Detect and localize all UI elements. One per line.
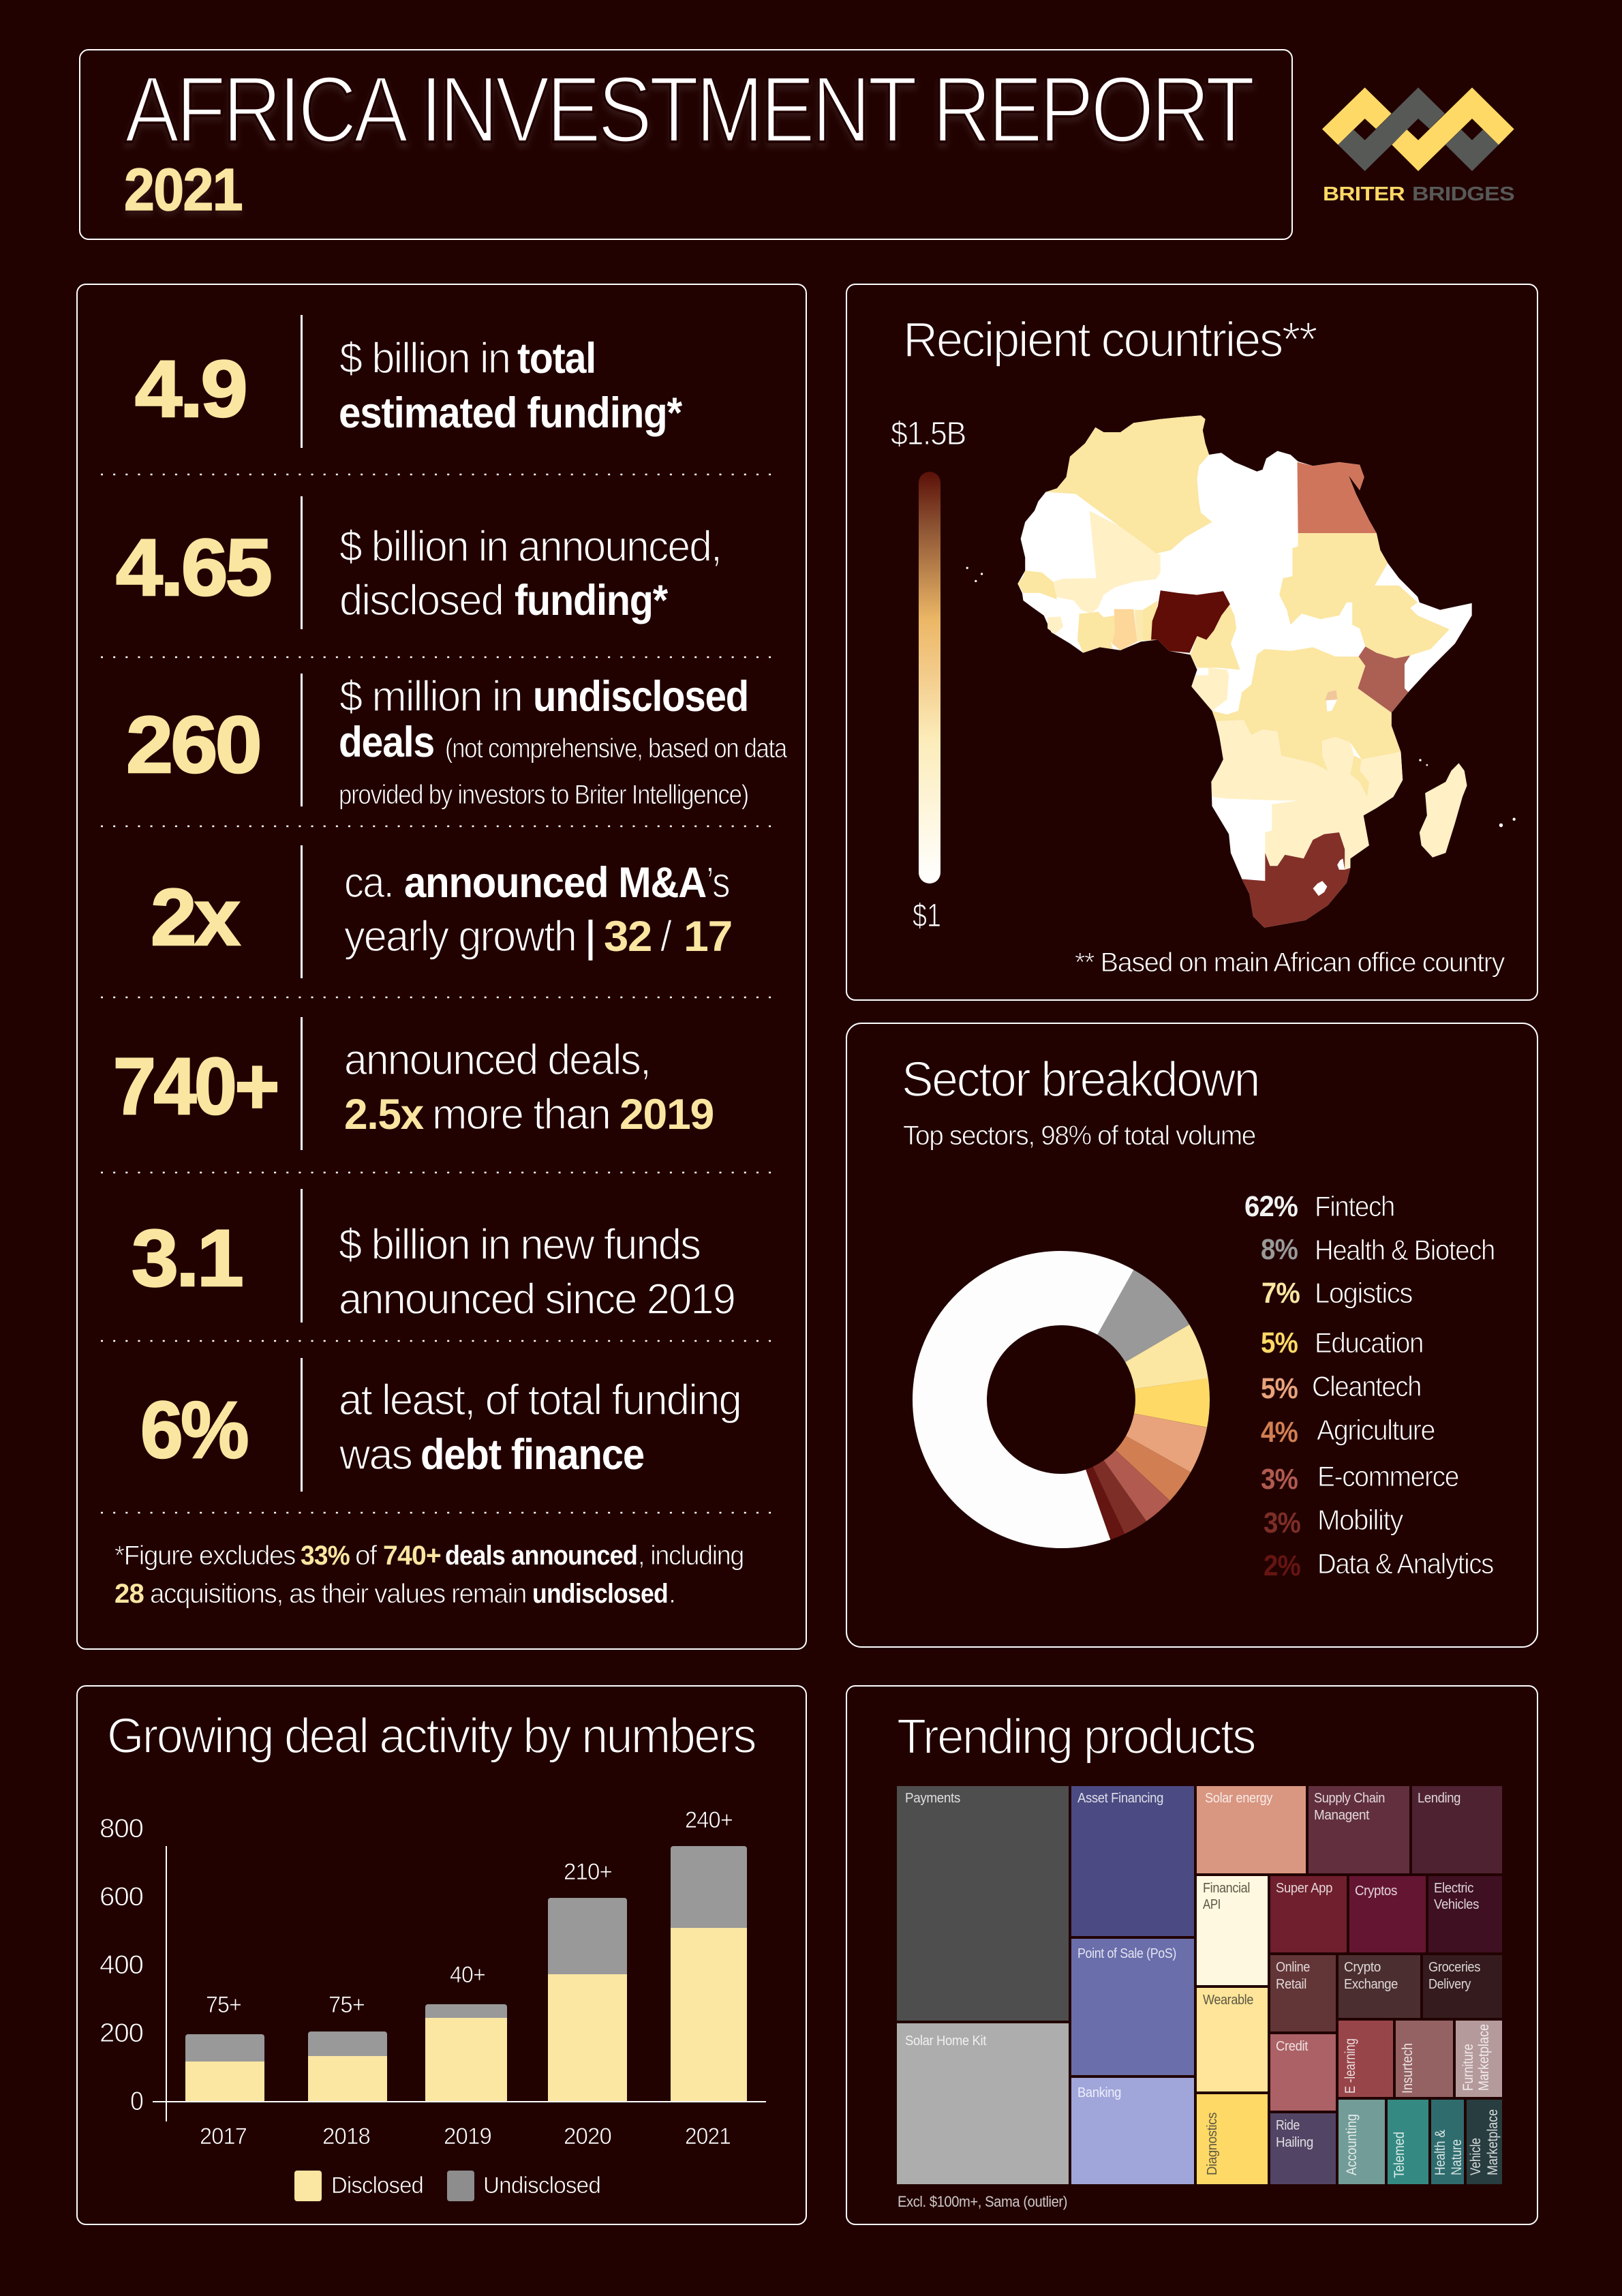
stat: 2x M&A growth: /: [660, 913, 672, 961]
sector legend: Cleantech: [1312, 1370, 1421, 1402]
footnote: 740+: [383, 1541, 441, 1571]
footnote: of: [355, 1541, 378, 1571]
bars 2018: 75+: [328, 1992, 365, 2018]
stat: 4.65 billion disclosed funding: $ billion in announced,: [339, 523, 721, 571]
stat: 2x M&A growth: ’s: [706, 859, 729, 907]
sector legend: Agriculture: [1317, 1414, 1435, 1446]
stat: 6% debt finance: was: [339, 1431, 412, 1479]
stat: 4.9 billion total funding: 4.9: [135, 344, 245, 434]
treemap note: Excl. $100m+, Sama (outlier): [898, 2193, 1067, 2210]
treemap: Solar energy: [1205, 1791, 1272, 1806]
stat: 2x M&A growth: |: [586, 913, 594, 961]
footnote: , including: [638, 1541, 744, 1571]
footnote: [114, 1541, 744, 1609]
stat: 740+ announced deals: 2.5x: [344, 1091, 424, 1138]
stat: 3.1 billion new funds: 3.1: [132, 1213, 242, 1303]
treemap: Solar Home Kit: [905, 2034, 987, 2049]
stat: 260 million undisclosed: 260: [126, 700, 260, 790]
treemap: Crypto: [1344, 1960, 1381, 1975]
treemap: Vehicles: [1434, 1897, 1479, 1912]
stat: 260 million undisclosed: undisclosed: [533, 673, 748, 721]
treemap: Vehicle: [1468, 2138, 1484, 2175]
treemap: Lending: [1418, 1791, 1460, 1806]
stat: 6% debt finance: at least, of total funding: [339, 1376, 741, 1424]
bars 2019: 40+: [450, 1962, 485, 1988]
treemap: Managent: [1314, 1808, 1370, 1823]
logo wordmark: [1323, 183, 1514, 205]
treemap: Financial: [1203, 1881, 1250, 1896]
panel: recipient countries: [846, 284, 1537, 1000]
logo mark: [1322, 87, 1514, 171]
stat: 2x M&A growth: [151, 845, 732, 978]
stat: 740+ announced deals: more than: [432, 1091, 610, 1138]
footnote: deals announced: [445, 1541, 637, 1571]
bars 2020: 210+: [564, 1859, 612, 1885]
sector legend: Health & Biotech: [1315, 1234, 1495, 1266]
colour scale legend: [891, 416, 966, 934]
treemap: Hailing: [1276, 2135, 1313, 2150]
footnote: undisclosed: [532, 1579, 668, 1609]
stat: 2x M&A growth: 2x: [151, 873, 240, 963]
y axis labels: 400: [100, 1950, 143, 1980]
stat: 260 million undisclosed: [126, 673, 788, 810]
stat: 4.65 billion disclosed funding: disclosed: [339, 577, 503, 624]
stat: 4.9 billion total funding: [135, 315, 683, 448]
y axis labels: 0: [130, 2087, 143, 2116]
stat: 3.1 billion new funds: [132, 1189, 735, 1323]
stat: 6% debt finance: [140, 1358, 741, 1492]
sector legend: Mobility: [1317, 1504, 1403, 1536]
treemap: Supply Chain: [1314, 1791, 1385, 1806]
sector legend: Fintech: [1315, 1190, 1394, 1222]
sector legend: 5%: [1261, 1372, 1298, 1405]
bars 2019: [425, 1962, 507, 2149]
sector legend: 8%: [1261, 1233, 1298, 1266]
map footnote: ** Based on main African office country: [1075, 948, 1505, 978]
subheading: Top sectors, 98% of total volume: [903, 1121, 1255, 1151]
sector legend: 2%: [1264, 1550, 1301, 1582]
treemap: Online: [1276, 1960, 1310, 1975]
treemap: Nature: [1449, 2139, 1465, 2175]
sector legend: 5%: [1261, 1327, 1298, 1359]
stat: 2x M&A growth: 17: [684, 913, 732, 961]
treemap: Asset Financing: [1077, 1791, 1163, 1806]
stat: 260 million undisclosed: (not comprehensive, based on data: [445, 734, 788, 764]
treemap: Insurtech: [1400, 2043, 1416, 2094]
treemap: Point of Sale (PoS): [1077, 1946, 1176, 1961]
y axis labels: [100, 1814, 143, 2116]
map of Africa: [966, 415, 1516, 928]
panel: sector breakdown: [846, 1023, 1537, 1647]
bars 2017: [185, 1992, 264, 2149]
stat: 260 million undisclosed: $ million in: [339, 673, 522, 721]
y axis labels: 800: [100, 1814, 143, 1843]
sector legend: 7%: [1261, 1277, 1300, 1310]
footnote: .: [669, 1579, 675, 1609]
header panel: [80, 50, 1292, 239]
stat: 4.9 billion total funding: $ billion in: [339, 335, 510, 382]
stat: 2x M&A growth: ca.: [344, 859, 393, 907]
treemap: Diagnostics: [1205, 2113, 1220, 2175]
stat: 6% debt finance: debt finance: [420, 1431, 644, 1479]
subtitle year: 2021: [124, 157, 242, 223]
colour scale legend: $1: [913, 898, 941, 934]
stat: 4.65 billion disclosed funding: funding*: [515, 577, 669, 624]
stat: 4.9 billion total funding: total: [517, 335, 596, 382]
bars 2021: 2021: [685, 2124, 731, 2149]
stat: 2x M&A growth: announced M&A: [404, 859, 706, 907]
treemap: [897, 1786, 1502, 2184]
stat: 2x M&A growth: 32: [604, 913, 652, 961]
treemap: Health &: [1433, 2130, 1448, 2175]
footnote: acquisitions, as their values remain: [150, 1579, 526, 1609]
sector legend: 3%: [1261, 1463, 1298, 1496]
donut chart: [904, 1242, 1219, 1557]
footnote: 28: [114, 1579, 144, 1609]
treemap: Wearable: [1203, 1993, 1253, 2008]
treemap: Electric: [1434, 1881, 1473, 1896]
stat: 740+ announced deals: 2019: [619, 1091, 714, 1138]
treemap: Marketplace: [1485, 2109, 1501, 2175]
treemap: Exchange: [1344, 1977, 1398, 1992]
stat: 3.1 billion new funds: announced since 2019: [339, 1275, 735, 1323]
heading: Growing deal activity by numbers: [107, 1709, 755, 1764]
title: AFRICA INVESTMENT REPORT: [125, 57, 1254, 162]
treemap: Super App: [1276, 1881, 1332, 1896]
treemap: Delivery: [1428, 1977, 1471, 1992]
treemap: Banking: [1077, 2085, 1121, 2100]
treemap: Credit: [1276, 2039, 1309, 2054]
heading: Sector breakdown: [902, 1053, 1259, 1107]
heading: Recipient countries**: [903, 313, 1317, 367]
sector legend: E-commerce: [1317, 1460, 1458, 1492]
treemap: Accounting: [1344, 2114, 1360, 2175]
stat: 2x M&A growth: yearly growth: [344, 913, 576, 961]
treemap: Retail: [1276, 1977, 1306, 1992]
treemap: Cryptos: [1355, 1884, 1397, 1899]
bars 2019: 2019: [444, 2124, 491, 2149]
chart legend: Disclosed: [331, 2173, 423, 2199]
sector legend: Logistics: [1315, 1277, 1412, 1309]
sector legend: 62%: [1244, 1190, 1298, 1223]
bars 2018: 2018: [322, 2124, 370, 2149]
treemap: Telemed: [1392, 2132, 1407, 2178]
bars 2017: 2017: [200, 2124, 247, 2149]
heading: Trending products: [897, 1710, 1255, 1764]
panel: trending products: [846, 1686, 1537, 2224]
treemap: API: [1203, 1897, 1221, 1912]
treemap: Payments: [905, 1791, 960, 1806]
stacked bar chart: [100, 1807, 766, 2149]
stat: 740+ announced deals: 740+: [113, 1042, 277, 1132]
panel: key statistics: [77, 284, 806, 1649]
sector legend: Education: [1315, 1327, 1423, 1359]
stat: 4.65 billion disclosed funding: [116, 496, 721, 629]
stat: 4.9 billion total funding: estimated funding*: [339, 389, 683, 437]
sector legend: 3%: [1264, 1507, 1301, 1539]
panel: growing deal activity: [77, 1686, 806, 2224]
stat: 4.65 billion disclosed funding: 4.65: [116, 523, 271, 613]
stat: 740+ announced deals: announced deals,: [344, 1036, 650, 1084]
logo wordmark: BRIDGES: [1412, 183, 1514, 205]
chart legend: Undisclosed: [483, 2173, 600, 2199]
stat: 6% debt finance: 6%: [140, 1385, 247, 1475]
treemap: Marketplace: [1476, 2024, 1492, 2091]
stat: 260 million undisclosed: provided by investors to Briter Intelligence): [339, 780, 748, 810]
stat: 3.1 billion new funds: $ billion in new funds: [339, 1221, 700, 1269]
logo wordmark: BRITER: [1323, 183, 1405, 205]
treemap: Furniture: [1460, 2044, 1476, 2091]
y axis labels: 200: [100, 2019, 143, 2048]
sector legend: Data & Analytics: [1317, 1547, 1493, 1580]
sector legend: 4%: [1261, 1416, 1298, 1449]
treemap: Ride: [1276, 2118, 1300, 2133]
footnote: *Figure excludes: [114, 1541, 295, 1571]
bars 2021: [671, 1807, 747, 2149]
footnote: 33%: [301, 1541, 350, 1571]
treemap: Groceries: [1428, 1960, 1480, 1975]
chart legend: [294, 2171, 600, 2201]
colour scale legend: $1.5B: [891, 416, 966, 452]
treemap: E -learning: [1343, 2038, 1358, 2094]
bars 2020: [548, 1859, 627, 2149]
logo: Briter Bridges: [1322, 87, 1514, 205]
y axis labels: 600: [100, 1882, 143, 1912]
stat: 260 million undisclosed: deals: [339, 719, 434, 766]
bars 2017: 75+: [206, 1992, 241, 2018]
bars 2018: [308, 1992, 387, 2149]
sector legend: [1244, 1190, 1495, 1582]
bars 2020: 2020: [564, 2124, 611, 2149]
stat: 740+ announced deals: [113, 1017, 714, 1150]
bars 2021: 240+: [685, 1807, 733, 1833]
